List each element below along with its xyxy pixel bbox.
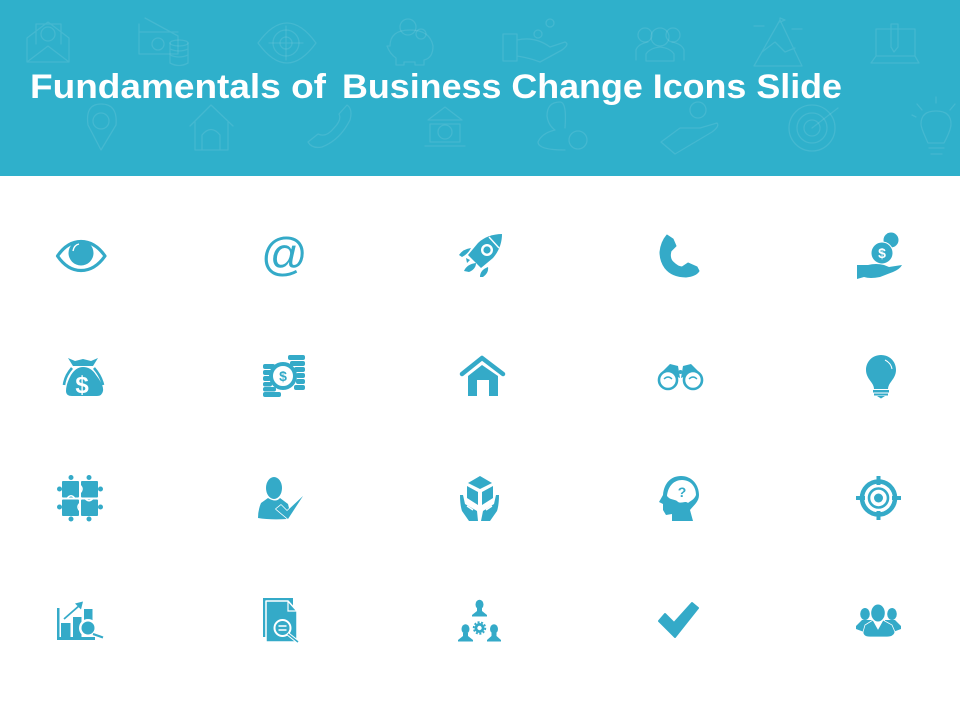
icon: telephone bbox=[660, 235, 699, 277]
header banner bbox=[0, 0, 960, 176]
icon: document with magnifier bbox=[263, 598, 298, 642]
icon: crosshair target bbox=[856, 476, 901, 520]
icon: at sign: @ bbox=[261, 228, 308, 280]
title: Fundamentals of bbox=[30, 68, 327, 106]
icon: eye bbox=[58, 240, 105, 270]
title bbox=[30, 68, 842, 106]
icon: hand with coins: $ bbox=[878, 245, 886, 261]
icon: head with question mark: ? bbox=[678, 484, 686, 500]
icon: bar chart with magnifier bbox=[57, 602, 103, 640]
icon: check mark bbox=[659, 603, 698, 637]
icon: money bag bbox=[64, 358, 103, 399]
icon: rocket bbox=[459, 234, 502, 277]
icon: puzzle bbox=[57, 475, 103, 522]
ghost line icons in banner bbox=[27, 18, 955, 154]
icon: house bbox=[462, 358, 503, 396]
icon: binoculars bbox=[659, 364, 702, 389]
icon: business group bbox=[856, 604, 901, 637]
icon: team around gear bbox=[458, 600, 501, 642]
icon: coin stacks bbox=[263, 355, 305, 397]
icon: hands holding box bbox=[460, 476, 499, 521]
icon: money bag: $ bbox=[75, 372, 89, 399]
icon: light bulb bbox=[866, 355, 896, 398]
icon: coin stacks: $ bbox=[279, 368, 287, 384]
icon: person with check bbox=[258, 477, 303, 519]
icon: head with question mark bbox=[659, 476, 699, 521]
icon grid bbox=[57, 228, 902, 642]
title: Business Change Icons Slide bbox=[342, 68, 842, 106]
icon: hand with coins bbox=[857, 232, 902, 279]
